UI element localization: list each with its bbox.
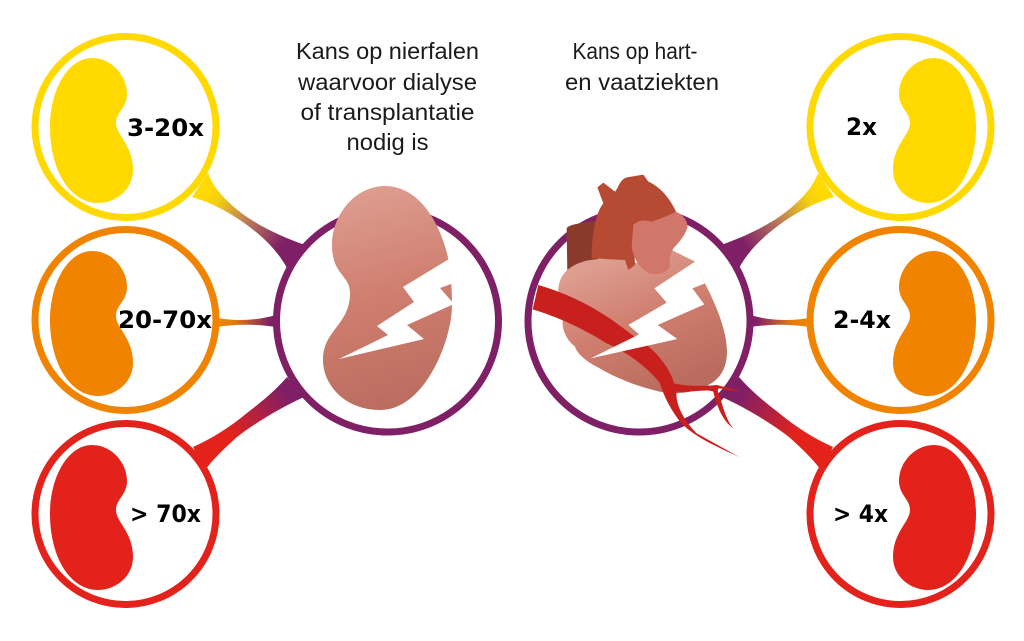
heading: kans op hart- en vaatziekten: Kans op hart- <box>572 38 698 64</box>
panel: red left circle over 70x <box>35 424 216 604</box>
heading: kans op hart- en vaatziekten <box>565 38 719 95</box>
panel: orange left circle 20-70x <box>35 230 216 410</box>
panel: yellow right circle 2x <box>810 36 991 218</box>
panel: orange left circle 20-70x: 20-70x <box>118 306 213 334</box>
heading: kans op nierfalen: waarvoor dialyse <box>297 69 477 95</box>
panel: orange right circle 2-4x <box>810 230 991 410</box>
panel: yellow left circle 3-20x <box>35 36 216 218</box>
icon: coronary artery <box>533 285 743 457</box>
connector: orange left <box>217 315 276 327</box>
icon: damaged kidney <box>323 186 452 410</box>
icon: damaged heart <box>533 175 743 457</box>
panel: orange right circle 2-4x: 2-4x <box>833 306 892 334</box>
panel: yellow right circle 2x: 2x <box>846 113 877 141</box>
icon: kidney lightning bolt <box>339 259 454 359</box>
connector: orange right <box>750 315 809 327</box>
heading: kans op nierfalen: Kans op nierfalen <box>296 38 479 64</box>
panel: red right circle over 4x <box>810 424 991 604</box>
panel: large heart circle <box>528 175 750 457</box>
connector: yellow right <box>721 173 834 268</box>
heading: kans op hart- en vaatziekten: en vaatziekten <box>565 69 719 95</box>
panel: red right circle over 4x: > 4x <box>833 500 888 528</box>
panel: yellow left circle 3-20x: 3-20x <box>127 114 205 142</box>
heading: kans op nierfalen <box>296 38 479 155</box>
heading: kans op nierfalen: of transplantatie <box>300 99 474 125</box>
icon: heart lightning bolt <box>591 262 705 358</box>
heading: kans op nierfalen: nodig is <box>346 129 428 155</box>
connector: red left <box>193 377 304 470</box>
panel: large kidney circle <box>276 186 498 432</box>
panel: red left circle over 70x: > 70x <box>130 500 201 528</box>
connector: red right <box>722 377 833 470</box>
connector: yellow left <box>192 173 305 268</box>
